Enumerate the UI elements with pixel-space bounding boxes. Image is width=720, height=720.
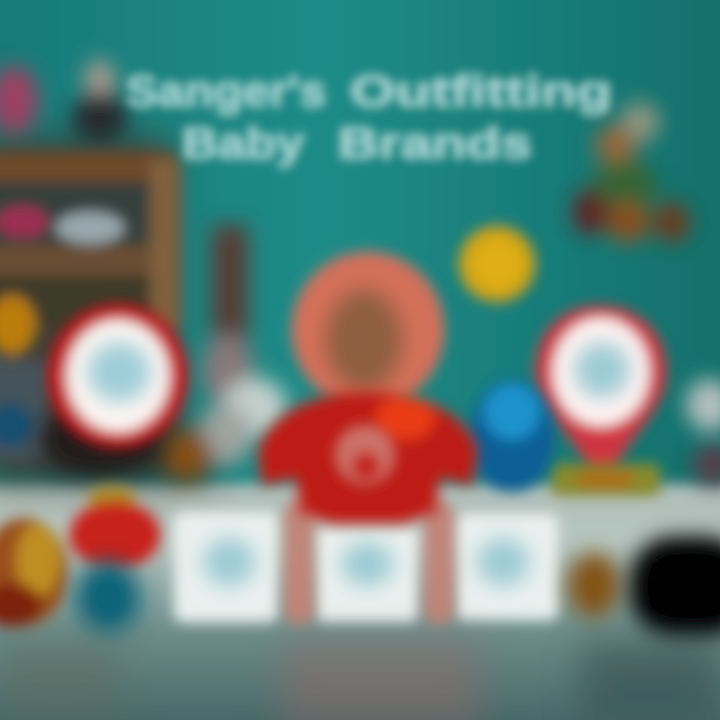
baby legs <box>284 500 454 625</box>
title: Brands <box>338 119 532 168</box>
baby figure <box>258 252 478 625</box>
title: Sanger's <box>126 67 326 116</box>
yellow sun circle <box>459 226 535 302</box>
wooden shelf <box>0 152 180 460</box>
shirt logo <box>335 425 395 485</box>
floor <box>0 484 720 720</box>
baby red shirt <box>258 392 478 524</box>
card 2 <box>316 528 418 622</box>
background wall <box>0 0 720 520</box>
floor reflections <box>0 640 720 720</box>
baby hood <box>292 252 444 408</box>
blue ball <box>470 380 554 492</box>
shelf toys top left <box>0 60 128 144</box>
card 3 <box>456 514 558 620</box>
left badge <box>40 304 188 476</box>
title: Outfitting <box>350 67 612 116</box>
brown post and white toy <box>163 225 287 481</box>
black object bottom right <box>630 536 720 636</box>
balls bottom left <box>0 486 161 633</box>
floor cards <box>174 512 558 622</box>
title <box>126 67 612 168</box>
far right toy <box>686 379 720 487</box>
dark backdrop behind left toys <box>0 140 210 480</box>
small amber toy <box>568 553 620 617</box>
toy stack top right <box>573 102 690 242</box>
right location pin badge <box>536 306 666 496</box>
card 1 <box>174 512 278 622</box>
baby face <box>326 290 402 390</box>
title: Baby <box>182 119 305 168</box>
